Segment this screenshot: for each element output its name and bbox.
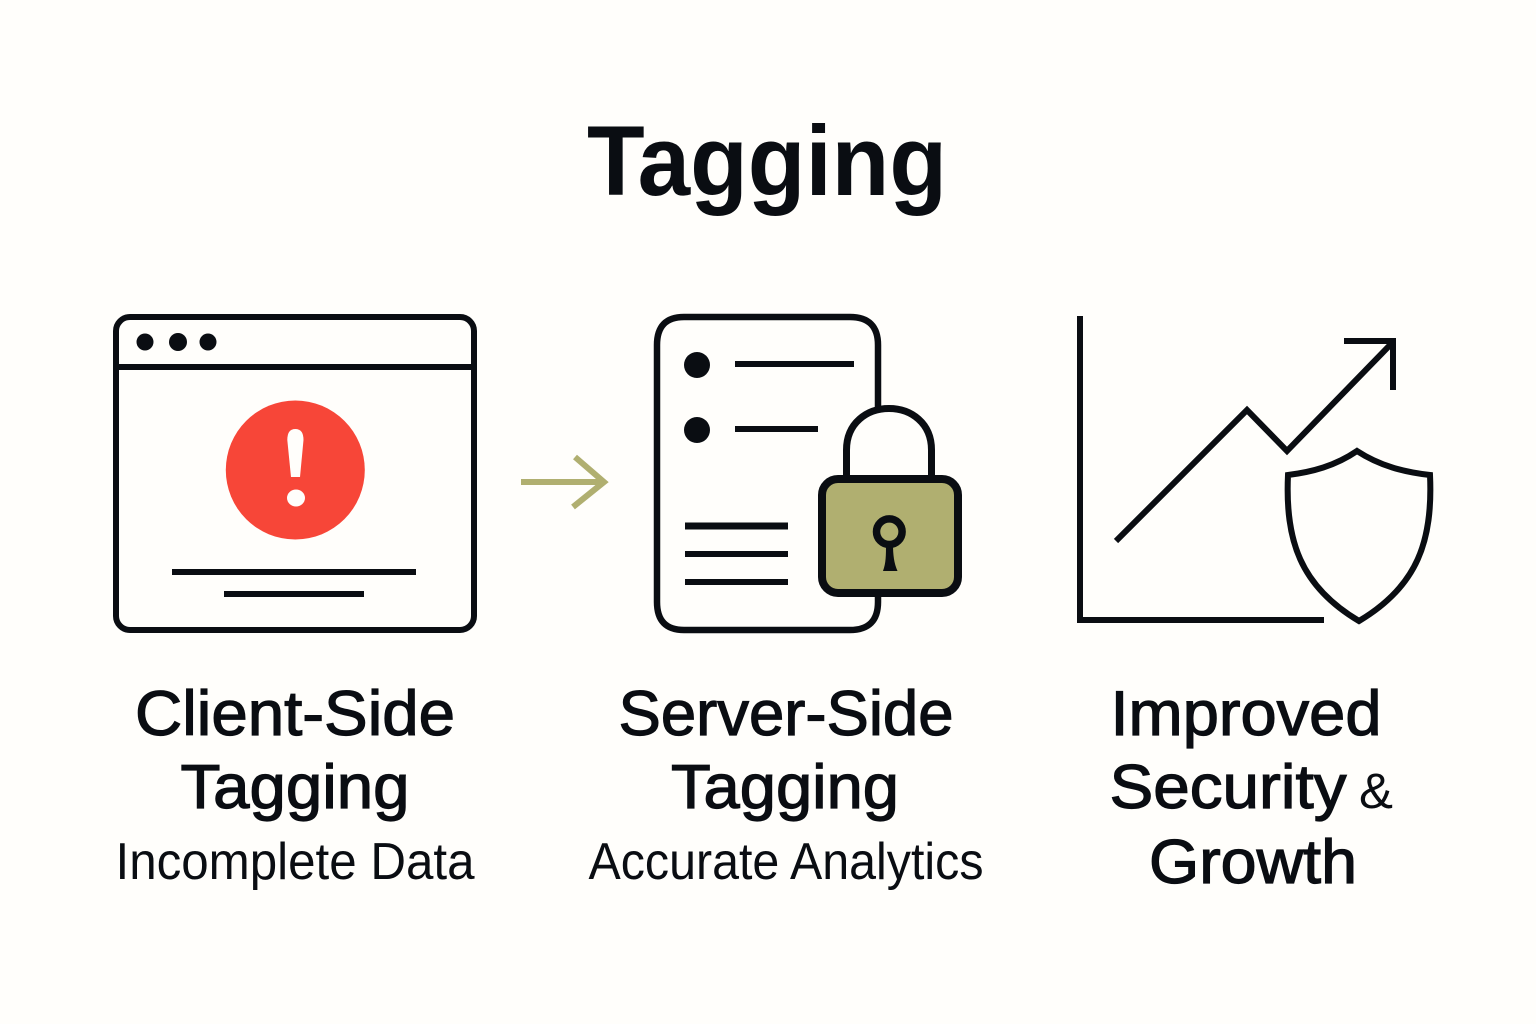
title: Tagging	[587, 105, 947, 216]
label: client-side tagging: Tagging	[180, 753, 410, 822]
label: improved security and growth: Improved	[1110, 679, 1382, 749]
label: server-side tagging: Server-Side	[618, 679, 954, 749]
icon: growth chart with shield	[1080, 316, 1430, 621]
label: client-side tagging: Incomplete Data	[116, 833, 475, 891]
icon: padlock	[822, 408, 958, 593]
label: improved security and growth: Growth	[1149, 828, 1357, 897]
label: client-side tagging: Client-Side	[135, 679, 455, 749]
label: client-side tagging	[116, 679, 475, 891]
icon: shield	[1288, 451, 1430, 621]
label: server-side tagging: Accurate Analytics	[588, 833, 984, 891]
arrow	[521, 457, 604, 507]
label: improved security and growth	[1110, 679, 1393, 897]
label: server-side tagging: Tagging	[671, 753, 899, 822]
label: server-side tagging	[588, 679, 984, 891]
label: improved security and growth: &	[1359, 763, 1393, 819]
label: improved security and growth: Security	[1110, 753, 1346, 822]
icon: server document with padlock	[657, 317, 958, 630]
icon: browser window with error	[116, 317, 474, 630]
